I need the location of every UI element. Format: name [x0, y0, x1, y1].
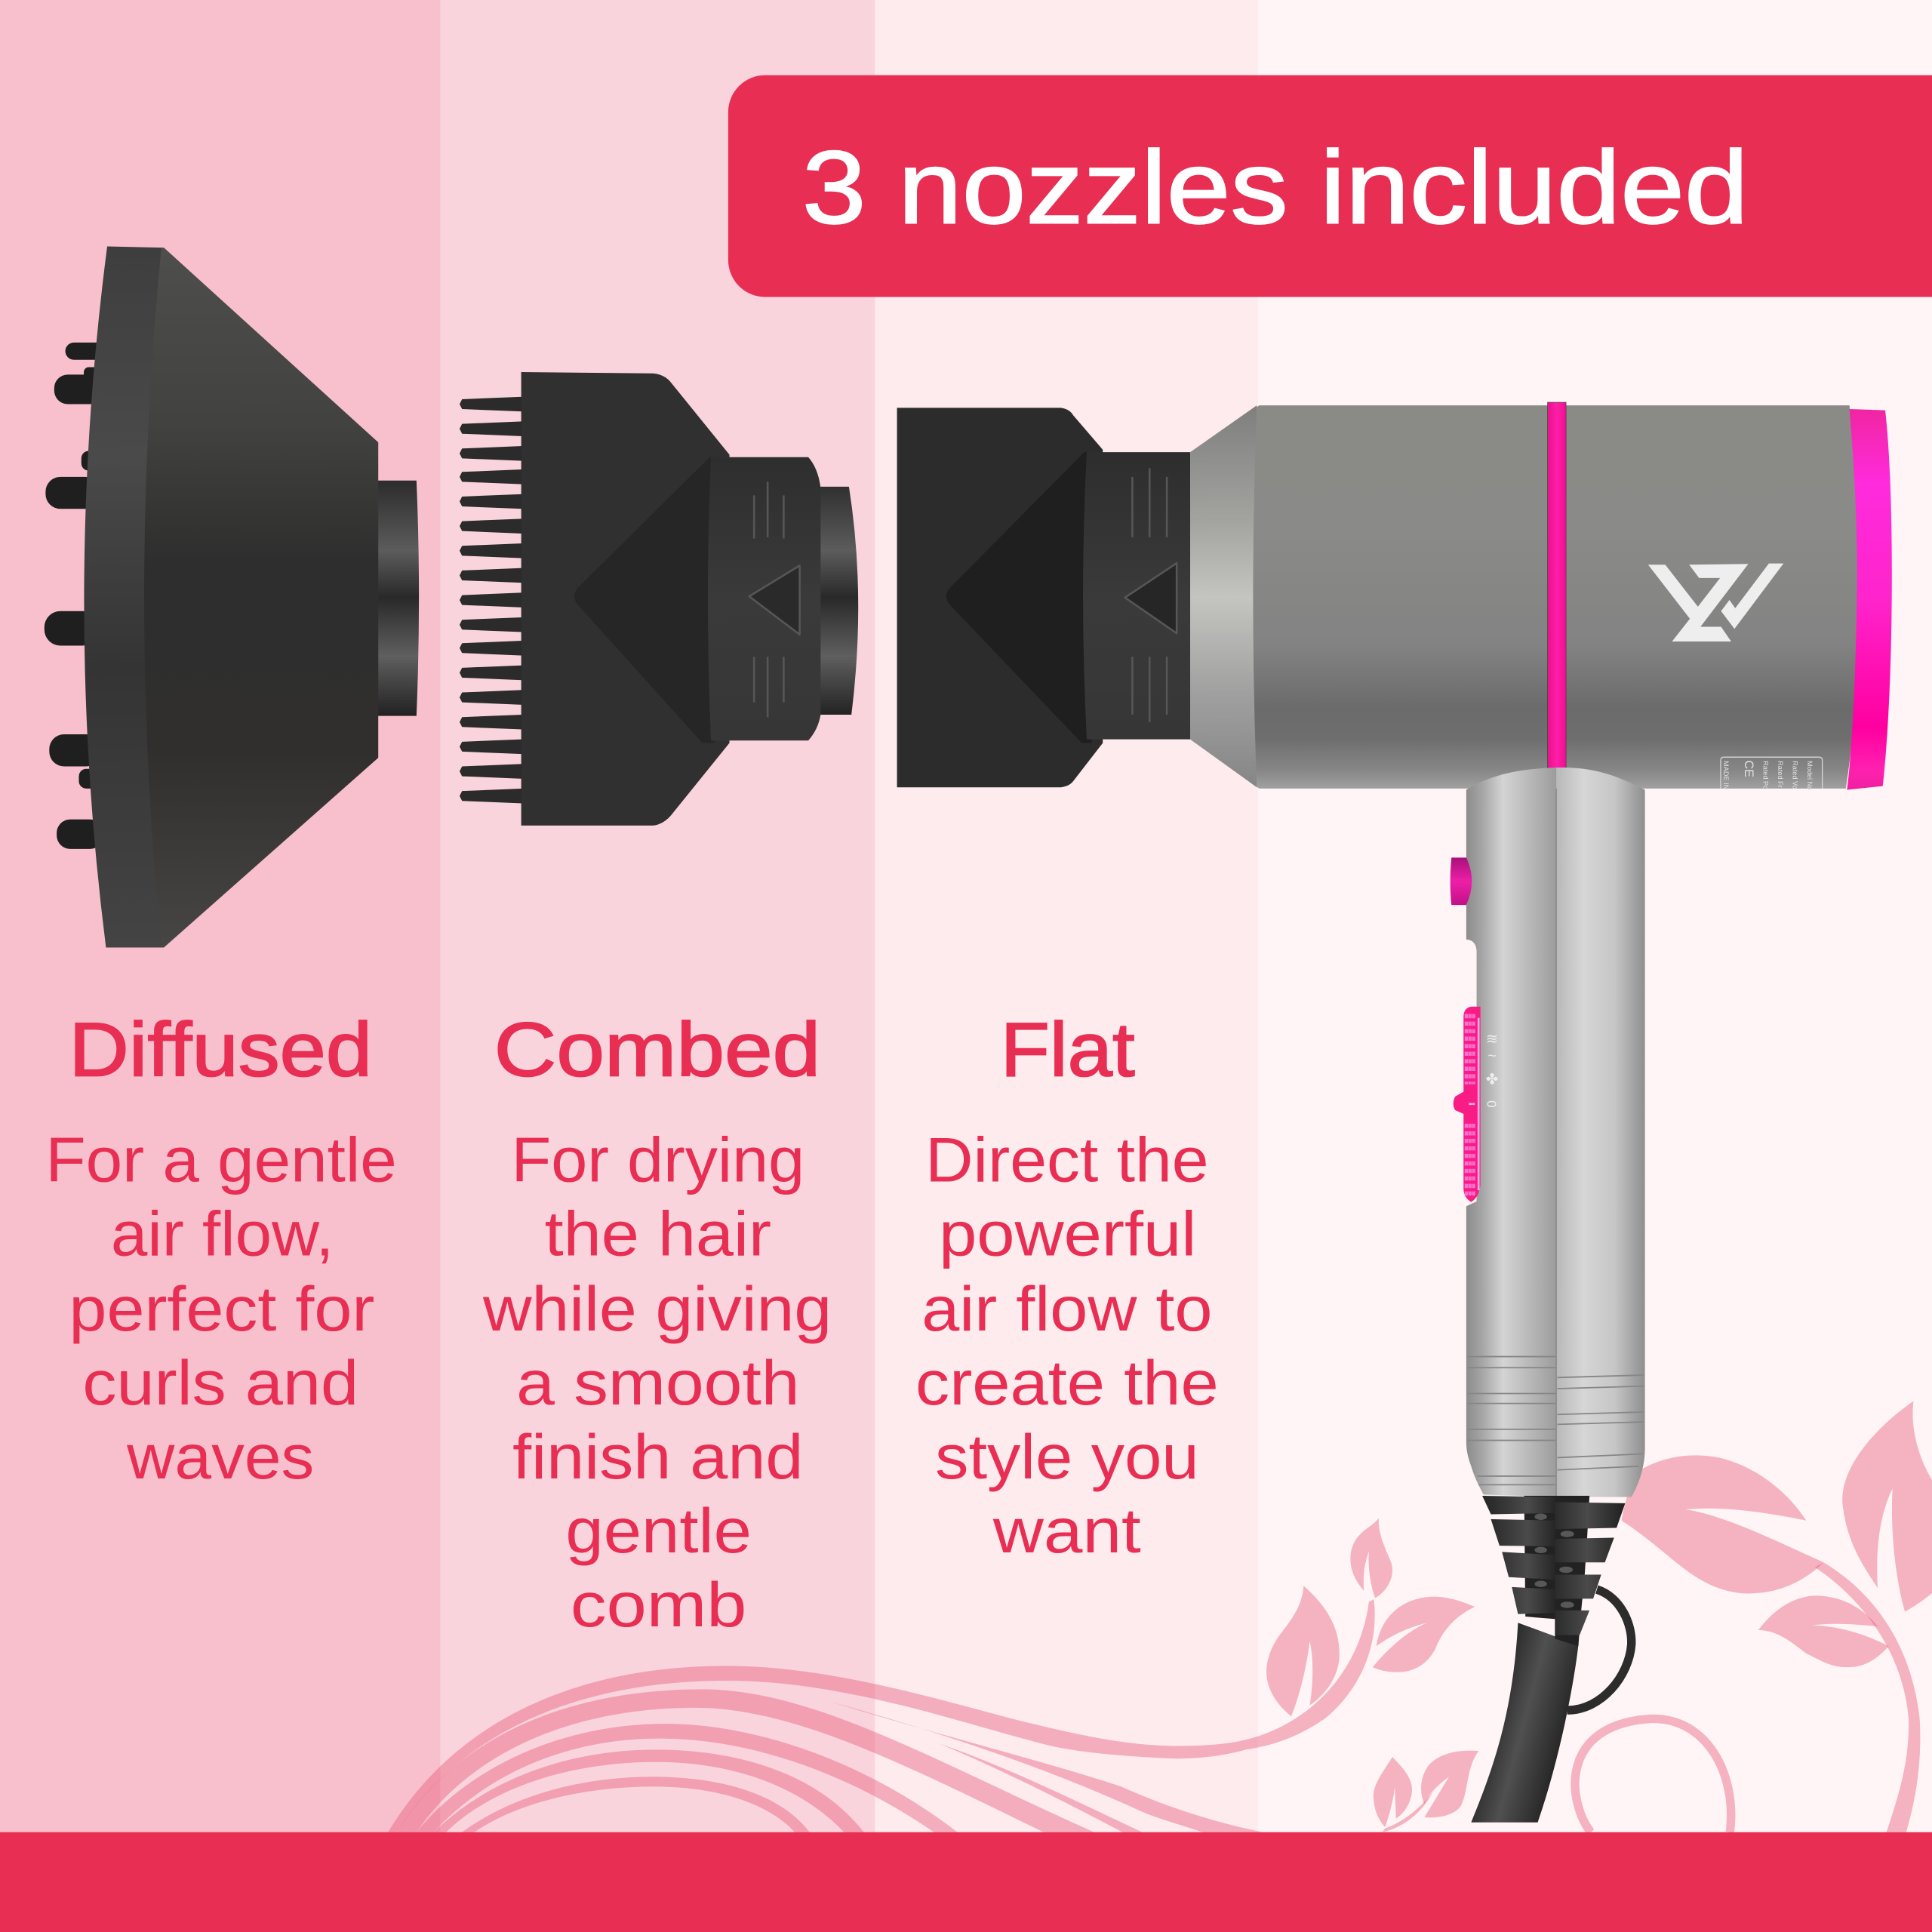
background column: flat — [875, 0, 1260, 1932]
comb teeth — [460, 397, 522, 803]
logo — [1648, 564, 1783, 641]
small stem — [1383, 1792, 1433, 1832]
body: diffused: For a gentle — [45, 1125, 397, 1195]
leaf: right middle — [1758, 1595, 1889, 1667]
body: diffused: air flow, — [111, 1199, 334, 1269]
slider labels: ≋ — [1486, 1031, 1498, 1048]
speed slider — [1454, 1007, 1481, 1202]
flat nozzle ribs — [1125, 468, 1177, 722]
flat nozzle block — [897, 408, 1103, 787]
flat nozzle collar — [1083, 452, 1190, 740]
heading: diffused: Diffused — [69, 1007, 372, 1092]
body: diffused: curls and — [82, 1348, 358, 1418]
body: combed: while giving — [482, 1274, 832, 1344]
right grip tiers — [1555, 1502, 1625, 1635]
leaf: bottom pair right — [1421, 1751, 1478, 1817]
body: diffused: waves — [126, 1422, 314, 1492]
column: combed — [482, 1007, 832, 1640]
rating label — [1721, 757, 1823, 790]
column: diffused — [45, 1007, 397, 1492]
flat heat warning triangle — [1125, 563, 1177, 633]
big right stem — [1815, 1562, 1920, 1832]
comb block — [521, 372, 730, 826]
collar gap highlights — [1534, 1514, 1574, 1608]
body: flat: Direct the — [925, 1125, 1209, 1195]
rating label text: CE — [1742, 760, 1755, 777]
rating label text: Rated Po — [1761, 761, 1769, 789]
strain relief collar — [1482, 1496, 1625, 1646]
wave band 5 — [462, 1777, 810, 1832]
diffuser rim — [84, 247, 162, 948]
flat nozzle wedge — [946, 452, 1092, 743]
body: flat: want — [992, 1496, 1141, 1566]
body: combed: comb — [571, 1570, 746, 1640]
leaf: far right — [1842, 1401, 1932, 1612]
comb nozzle — [460, 372, 858, 826]
slider labels: ~ — [1487, 1048, 1497, 1065]
swoosh B — [939, 1743, 1142, 1832]
decorative vine and waves — [388, 1401, 1932, 1832]
bottom band — [0, 1832, 1932, 1932]
rating label text — [1722, 760, 1814, 790]
pink ring — [1548, 402, 1566, 769]
wave band 1 with stem — [388, 1599, 1375, 1832]
slider labels — [1484, 1031, 1500, 1108]
body: diffused — [45, 1125, 397, 1492]
background column: diffused — [0, 0, 441, 1932]
dryer body — [1190, 405, 1859, 789]
header banner — [728, 75, 1932, 297]
diffuser cone — [123, 248, 378, 948]
body: combed: For drying — [512, 1125, 804, 1195]
wave band 3 — [417, 1724, 958, 1832]
slider grip dots — [1466, 1014, 1474, 1196]
dryer cone section — [1190, 405, 1257, 787]
wave band 2 — [397, 1689, 1094, 1832]
heading: flat: Flat — [1001, 1007, 1135, 1092]
left grip tiers — [1482, 1496, 1555, 1614]
slider labels: 0 — [1484, 1100, 1500, 1108]
comb inner wedge — [574, 457, 715, 743]
body: flat: style you — [935, 1422, 1199, 1492]
power button — [1451, 857, 1472, 905]
diffuser connector — [376, 481, 419, 716]
comb ribs — [749, 481, 800, 717]
leaf: lower left big — [1266, 1586, 1340, 1716]
handle right half — [1556, 768, 1645, 1497]
body: combed — [482, 1125, 832, 1640]
column: flat — [915, 1007, 1219, 1566]
body: diffused: perfect for — [69, 1274, 374, 1344]
body: flat: air flow to — [921, 1274, 1213, 1344]
rating label text: Model No — [1806, 761, 1814, 790]
leaf: top small — [1350, 1518, 1392, 1598]
body: flat: powerful — [939, 1199, 1196, 1269]
collar core — [1524, 1496, 1589, 1646]
leaf: right small — [1373, 1597, 1475, 1672]
banner title: 3 nozzles included — [802, 131, 1749, 246]
rating label text: MADE IN — [1722, 761, 1730, 789]
diffuser pins — [45, 343, 105, 849]
heading: combed: Combed — [494, 1007, 820, 1092]
leaf: bottom pair left — [1374, 1757, 1412, 1827]
body: combed: gentle — [565, 1496, 752, 1566]
handle left half — [1466, 768, 1558, 1497]
slider labels: ✤ — [1486, 1072, 1498, 1088]
handle rib lines — [1467, 789, 1644, 1497]
cord loop — [1567, 1589, 1632, 1710]
power cord — [1471, 1623, 1578, 1823]
heat warning triangle — [749, 565, 800, 635]
background column: combed — [441, 0, 875, 1932]
leaf: large central — [1622, 1455, 1823, 1594]
rating label text: Rated Vo — [1792, 761, 1799, 789]
comb tip connector — [814, 487, 858, 715]
body: combed: a smooth — [516, 1348, 800, 1418]
body: combed: the hair — [545, 1199, 771, 1269]
background column: dryer — [1258, 0, 1932, 1932]
body: combed: finish and — [512, 1422, 803, 1492]
diffuser nozzle — [45, 247, 419, 948]
body: flat: create the — [915, 1348, 1219, 1418]
pink end cap — [1847, 409, 1892, 790]
body: flat — [915, 1125, 1219, 1566]
rating label text: Rated Fr — [1777, 761, 1784, 788]
wave band 4 — [434, 1749, 863, 1832]
comb collar — [708, 457, 820, 740]
circular vine — [1575, 1718, 1731, 1832]
hair dryer — [897, 402, 1892, 1823]
swoosh A — [830, 1702, 1263, 1832]
slider highlight — [1469, 1018, 1478, 1190]
